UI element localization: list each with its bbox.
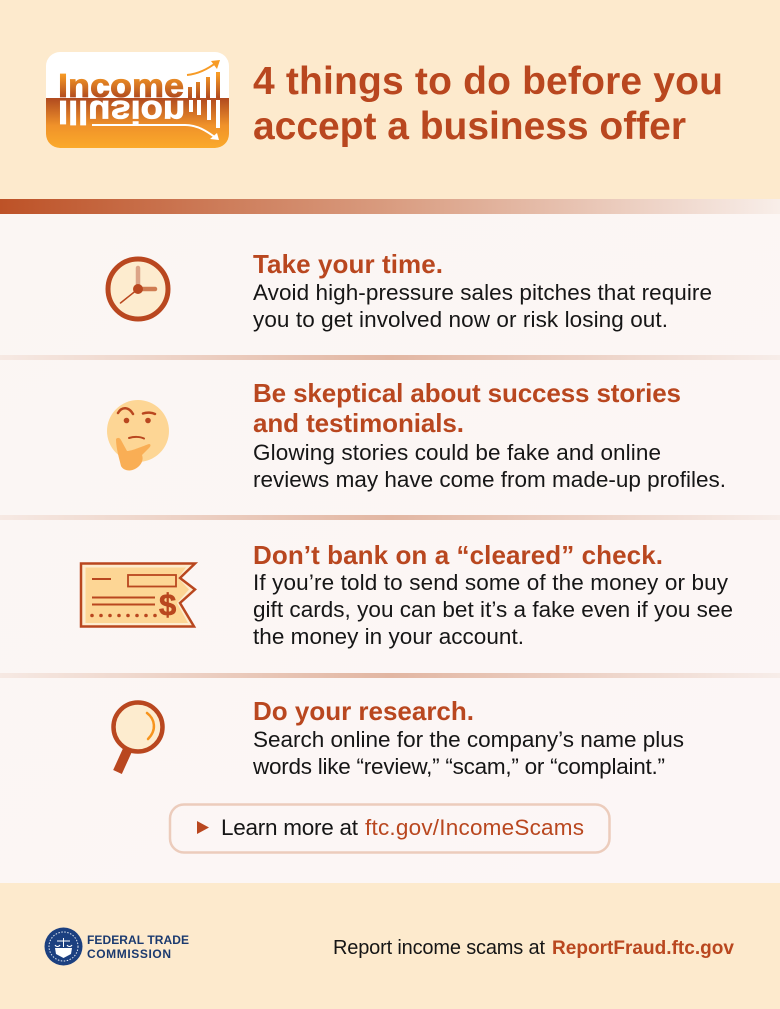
icon: play arrow [197,821,209,834]
logo: Income Illusion: Illusion [58,94,185,131]
panel: be skeptical [107,378,726,492]
text: do your research: Search online for the company’s name plus [253,727,684,752]
logo: Income Illusion [46,52,229,148]
text: cleared check: the money in your account. [253,624,524,649]
heading: be skeptical: and testimonials. [253,408,464,438]
title: 4 things to do before you [253,60,723,103]
text: take your time: you to get involved now or risk losing out. [253,307,668,332]
logo: Federal Trade Commission: COMMISSION [87,947,171,961]
panel: take your time [108,249,712,332]
text: report income scams: Report income scams at [333,937,545,959]
heading: cleared check: Don’t bank on a “cleared” check. [253,540,663,570]
icon: clock [108,259,168,319]
logo: Income Illusion: Income [58,67,184,104]
text: be skeptical: Glowing stories could be fake and online [253,440,661,465]
panel: cleared check [81,540,733,649]
callout: learn more: Learn more at [221,815,359,840]
text: do your research: words like “review,” “scam,” or “complaint.” [252,754,665,779]
header band [0,0,780,199]
heading: be skeptical: Be skeptical about success stories [253,378,681,408]
icon: thinking face [107,400,169,470]
text: do your research [252,727,684,779]
title: accept a business offer [253,105,686,148]
text: report income scams [333,937,734,959]
text: cleared check: If you’re told to send some of the money or buy [253,570,729,595]
text: take your time: Avoid high-pressure sales pitches that require [253,280,712,305]
icon: check: $ [159,587,176,622]
page background [0,214,780,883]
header gradient bar [0,199,780,214]
callout: learn more: ftc.gov/IncomeScams [365,815,584,840]
logo: Federal Trade Commission: FEDERAL TRADE [87,933,189,947]
callout: learn more [170,804,610,852]
text: report income scams: ReportFraud.ftc.gov [552,938,734,959]
heading: take your time: Take your time. [253,249,443,279]
text: cleared check: gift cards, you can bet it’s a fake even if you see [253,597,733,622]
text: cleared check [253,570,733,649]
text: be skeptical: reviews may have come from made-up profiles. [253,467,726,492]
text: take your time [253,280,712,332]
text: be skeptical [253,440,726,492]
icon: check [81,564,195,626]
icon: magnifying glass [114,702,162,772]
heading: be skeptical [253,378,681,438]
heading: do your research: Do your research. [253,696,474,726]
logo: Federal Trade Commission [44,928,189,966]
title [253,60,723,148]
footer band [0,883,780,1009]
panel: do your research [114,696,684,779]
